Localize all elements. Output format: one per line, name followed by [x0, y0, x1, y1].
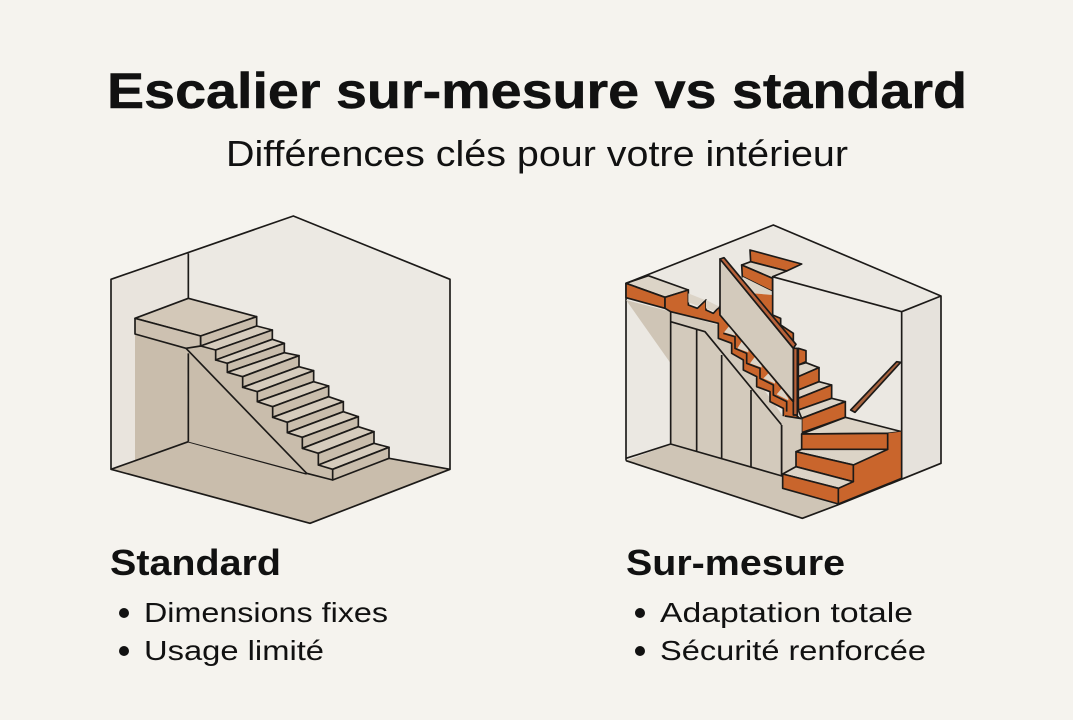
- title: Escalier sur-mesure vs standard: [107, 63, 967, 119]
- upper part of the stairs: [626, 250, 802, 478]
- landing: [135, 298, 257, 336]
- newel post: [793, 348, 797, 415]
- heading: standard: Standard: [110, 542, 281, 583]
- wall handrail: [851, 362, 901, 412]
- lower part of the stairs: [782, 348, 902, 504]
- list: standard: Dimensions fixes: [144, 597, 388, 628]
- stringer: [665, 290, 802, 420]
- under-stair closet: [671, 312, 802, 478]
- top flight: [750, 250, 802, 271]
- illustration: standard staircase: [111, 216, 450, 523]
- room shell: [626, 225, 941, 518]
- subtitle: Différences clés pour votre intérieur: [226, 133, 848, 174]
- heading: custom: Sur-mesure: [626, 542, 845, 583]
- list: custom: Sécurité renforcée: [660, 635, 926, 666]
- guard panel with rail: [720, 258, 796, 402]
- steps: [201, 317, 389, 480]
- list: custom: Adaptation totale: [660, 597, 913, 628]
- small treads: [724, 325, 788, 400]
- illustration: custom staircase: [626, 225, 941, 518]
- list: standard: [119, 597, 388, 666]
- list: standard: Usage limité: [144, 635, 324, 666]
- landing: [626, 276, 688, 297]
- list: custom: [635, 597, 926, 666]
